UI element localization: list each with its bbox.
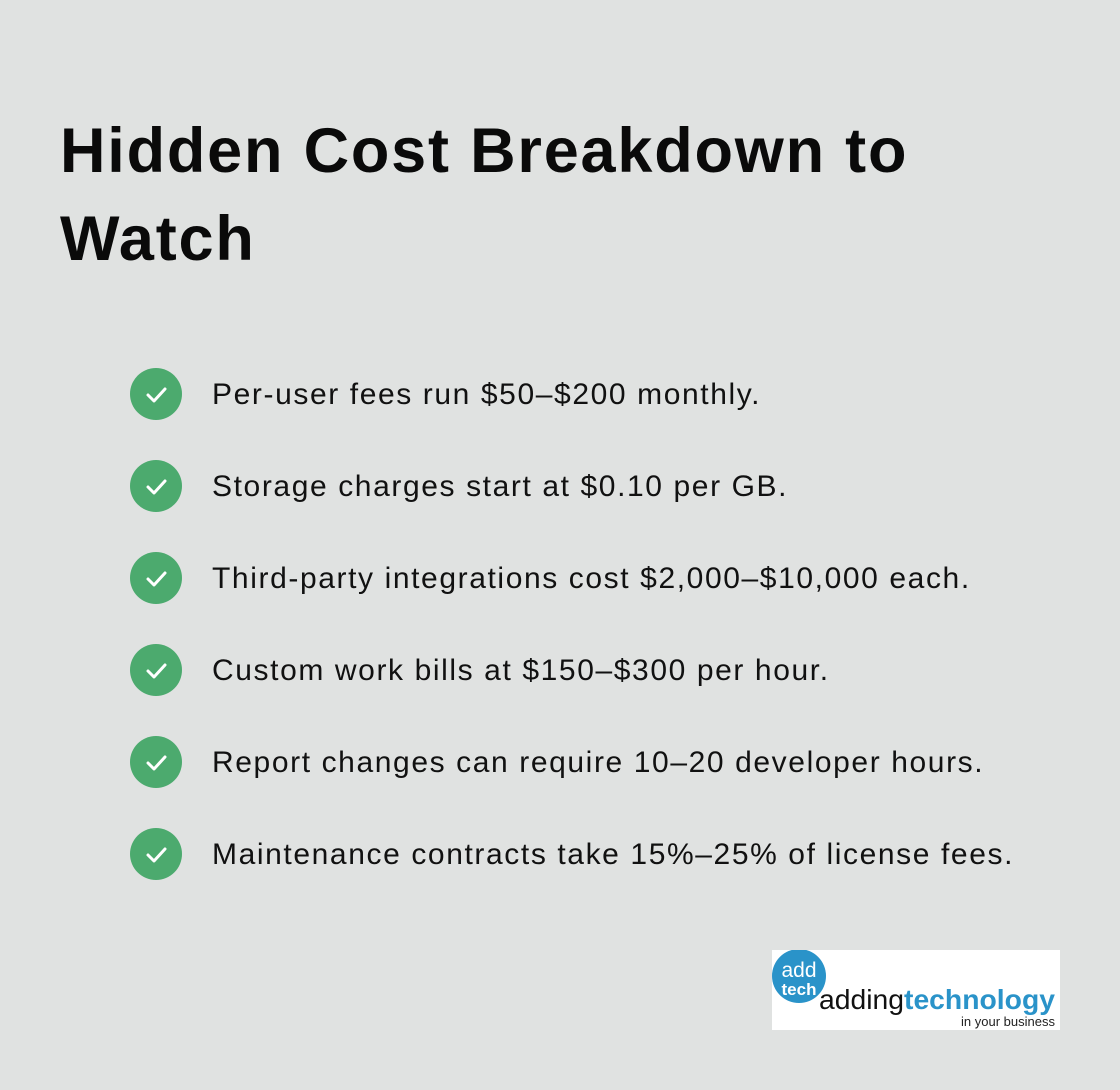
icon: check xyxy=(130,736,182,788)
list item 4 xyxy=(130,644,830,696)
list item 1 xyxy=(130,368,761,420)
icon: check xyxy=(130,460,182,512)
logo: in your business xyxy=(961,1014,1055,1029)
icon: check xyxy=(130,828,182,880)
logo: tech xyxy=(782,980,816,999)
list item 3: Third-party integrations cost $2,000–$10,000 each. xyxy=(212,562,971,595)
list item 5: Report changes can require 10–20 developer hours. xyxy=(212,746,984,779)
list item 1: Per-user fees run $50–$200 monthly. xyxy=(212,378,761,411)
logo xyxy=(772,950,1060,1030)
list item 5 xyxy=(130,736,984,788)
logo: add xyxy=(781,959,817,982)
list item 2 xyxy=(130,460,788,512)
list item 2: Storage charges start at $0.10 per GB. xyxy=(212,470,788,503)
list item 4: Custom work bills at $150–$300 per hour. xyxy=(212,654,830,687)
logo: addingtechnology xyxy=(819,984,1055,1015)
title: Hidden Cost Breakdown to xyxy=(60,116,908,186)
title xyxy=(60,116,908,274)
list item 3 xyxy=(130,552,971,604)
list item 6 xyxy=(130,828,1014,880)
title: Watch xyxy=(60,204,256,274)
icon: check xyxy=(130,644,182,696)
list item 6: Maintenance contracts take 15%–25% of license fees. xyxy=(212,838,1014,871)
icon: check xyxy=(130,552,182,604)
icon: check xyxy=(130,368,182,420)
